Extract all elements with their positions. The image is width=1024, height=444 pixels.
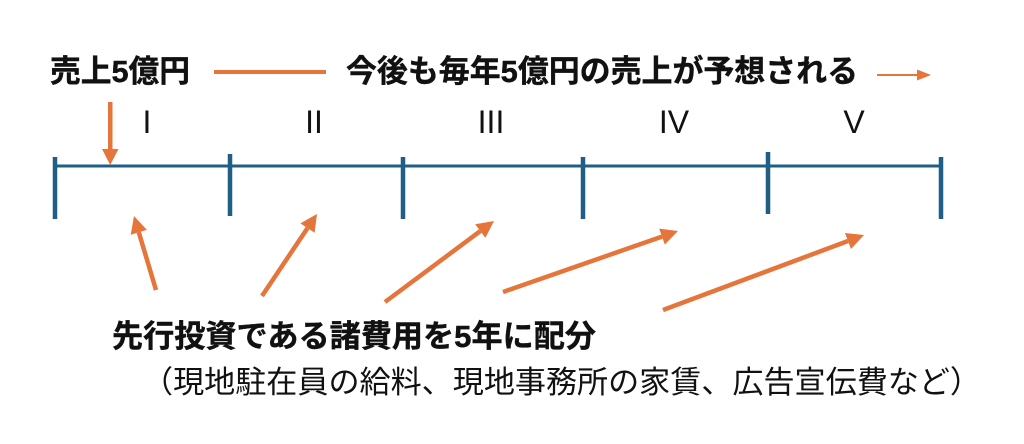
- arrows: allocation to five years: [131, 214, 864, 310]
- arrow: sales into year one: [102, 102, 118, 165]
- period labels: V: [843, 104, 865, 140]
- period labels: [143, 104, 865, 140]
- connector line: [214, 70, 326, 74]
- heading: expected annual sales: 今後も毎年5億円の売上が予想される: [346, 54, 858, 89]
- arrow: year I: [131, 216, 156, 290]
- period labels: III: [478, 104, 504, 140]
- arrow: year V: [663, 233, 864, 310]
- period labels: IV: [659, 104, 690, 140]
- period labels: I: [143, 104, 151, 140]
- arrow: year IV: [503, 229, 678, 292]
- text: allocation of prepaid expenses: 先行投資である諸費用を5年に配分: [112, 319, 596, 354]
- period labels: II: [305, 104, 323, 140]
- text: expense examples: （現地駐在員の給料、現地事務所の家賃、広告宣伝費など）: [142, 365, 981, 400]
- heading: sales of 500 million yen: 売上5億円: [50, 54, 190, 89]
- arrow: year III: [385, 221, 494, 302]
- timeline: [53, 152, 943, 219]
- arrow: sales continue: [877, 70, 931, 80]
- arrow: year II: [262, 214, 317, 296]
